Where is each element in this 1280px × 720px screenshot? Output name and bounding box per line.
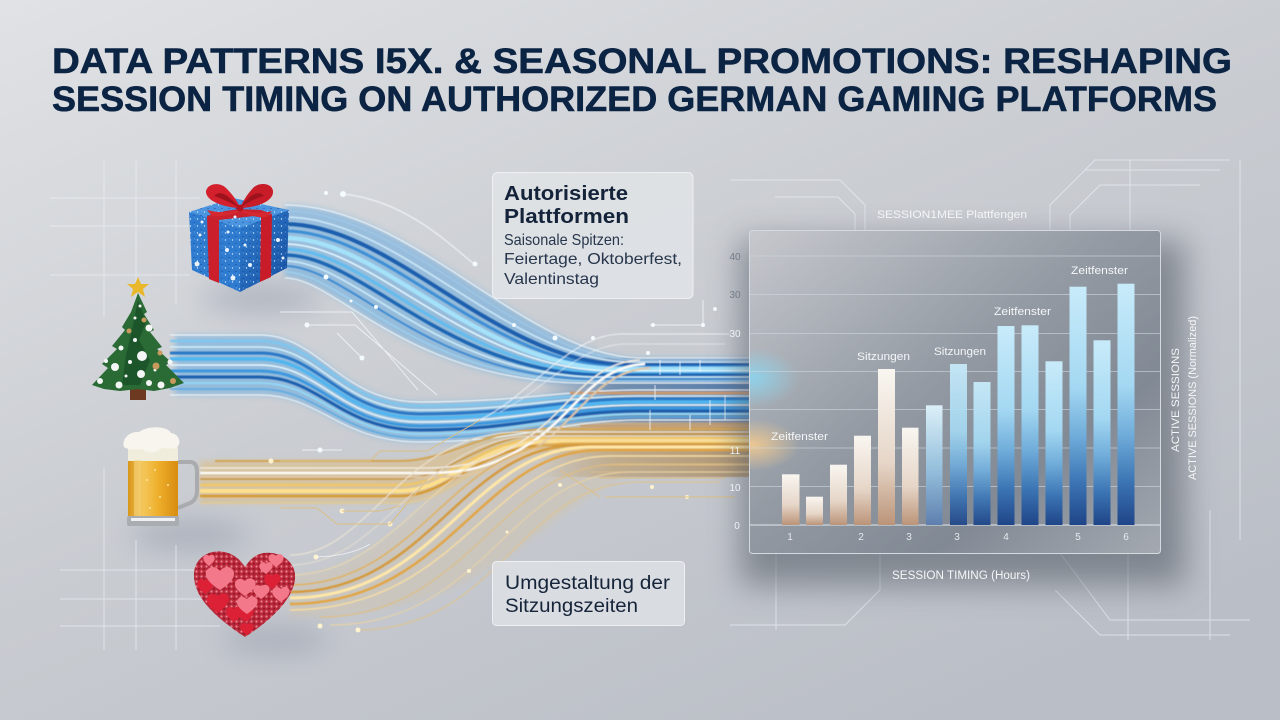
stream: gift (blue) bbox=[285, 194, 750, 383]
callout body bbox=[504, 232, 682, 288]
title: SESSION TIMING ON AUTHORIZED GERMAN GAMING PLATFORMS bbox=[52, 80, 1217, 119]
stream: heart (gold) bbox=[290, 432, 750, 630]
x axis tick labels: 4 bbox=[1003, 532, 1009, 543]
chart panel bbox=[704, 230, 1160, 554]
right merged band backdrop bbox=[540, 358, 750, 477]
x axis title: SESSION TIMING (Hours) bbox=[892, 570, 1030, 582]
icon: christmas tree bbox=[92, 277, 184, 400]
stream: merged colour lines bbox=[570, 393, 750, 472]
y axis title bbox=[1170, 316, 1199, 480]
y axis tick labels: 10 bbox=[729, 483, 741, 494]
y axis tick labels: 40 bbox=[729, 252, 741, 263]
chart shadow bbox=[740, 240, 1185, 585]
bar chart bbox=[782, 284, 1134, 525]
x axis tick labels: 3 bbox=[954, 532, 960, 543]
title: DATA PATTERNS I5X. & SEASONAL PROMOTIONS: RESHAPING bbox=[52, 42, 1232, 81]
bar annotations: Zeitfenster bbox=[1071, 265, 1128, 277]
callout: session timing reshaping: Umgestaltung der bbox=[505, 573, 671, 594]
callout heading: Plattformen bbox=[504, 206, 629, 228]
stream: beer (gold) bbox=[200, 429, 750, 503]
callout: session timing reshaping: Sitzungszeiten bbox=[505, 596, 638, 617]
title bbox=[52, 42, 1232, 119]
y axis tick labels: 30 bbox=[729, 290, 741, 301]
x axis tick labels: 6 bbox=[1123, 532, 1129, 543]
bar annotations: Sitzungen bbox=[857, 351, 910, 363]
callout body: Valentinstag bbox=[504, 271, 599, 288]
stream: silver crossing band bbox=[200, 334, 730, 477]
y axis title: ACTIVE SESSIONS bbox=[1170, 348, 1182, 452]
x axis tick labels: 5 bbox=[1075, 532, 1081, 543]
y axis tick labels: 0 bbox=[734, 521, 740, 532]
callout heading bbox=[504, 183, 629, 228]
bar annotations bbox=[771, 265, 1128, 443]
bar annotations: Zeitfenster bbox=[994, 306, 1051, 318]
y axis title: ACTIVE SESSIONS (Normalized) bbox=[1187, 316, 1199, 480]
x axis tick labels: 3 bbox=[906, 532, 912, 543]
bar annotations: Zeitfenster bbox=[771, 431, 828, 443]
callout heading: Autorisierte bbox=[504, 183, 628, 205]
stream: tree (light blue) bbox=[170, 335, 750, 442]
callout: session timing reshaping bbox=[492, 562, 684, 626]
callout body: Saisonale Spitzen: bbox=[504, 232, 624, 249]
flow streams from seasonal icons to chart bbox=[170, 194, 750, 630]
x axis tick labels: 1 bbox=[787, 532, 793, 543]
callout body: Feiertage, Oktoberfest, bbox=[504, 251, 682, 268]
icon: heart cluster bbox=[194, 551, 295, 637]
bar annotations: Sitzungen bbox=[934, 346, 986, 358]
x axis tick labels: 2 bbox=[858, 532, 864, 543]
y axis tick labels: 30 bbox=[729, 329, 741, 340]
icon: beer mug bbox=[123, 427, 197, 526]
icon: gift box bbox=[189, 184, 289, 292]
chart top label: SESSION1MEE Plattfengen bbox=[877, 209, 1027, 221]
callout: authorized platforms bbox=[492, 172, 693, 298]
x axis tick labels bbox=[787, 532, 1129, 543]
y axis tick labels bbox=[729, 252, 741, 532]
y axis tick labels: 11 bbox=[730, 446, 741, 457]
flow nodes and sparkles bbox=[268, 191, 735, 632]
stream backdrops bbox=[175, 205, 750, 617]
